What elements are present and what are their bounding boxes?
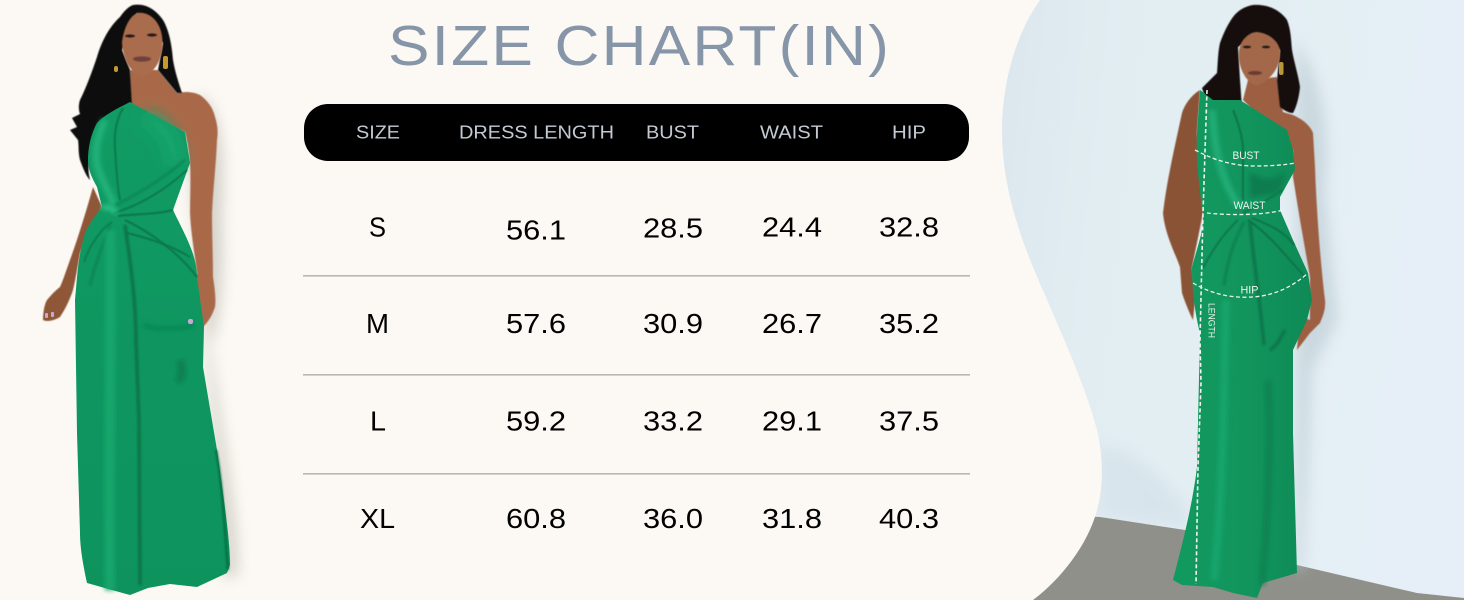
hair bbox=[70, 5, 182, 180]
row XL: XL bbox=[360, 503, 395, 534]
row S: 56.1 bbox=[506, 214, 566, 246]
right arm and shoulder bbox=[130, 70, 218, 328]
model soft shadow bbox=[190, 95, 238, 580]
row XL: 60.8 bbox=[506, 503, 566, 534]
table header bar: WAIST bbox=[760, 122, 823, 142]
hand nails bbox=[45, 312, 193, 324]
dress folds bbox=[84, 108, 228, 590]
row M: M bbox=[366, 308, 389, 339]
green dress bbox=[75, 102, 230, 595]
facial features bbox=[1243, 46, 1270, 75]
bust dashed line bbox=[1195, 150, 1295, 166]
figure right-side arm (image left) bbox=[1163, 90, 1203, 320]
facial features bbox=[125, 34, 157, 62]
row M: 30.9 bbox=[643, 308, 703, 339]
row M: 57.6 bbox=[506, 308, 566, 339]
size table bbox=[303, 104, 970, 534]
row L bbox=[370, 406, 939, 436]
row S: 32.8 bbox=[879, 212, 939, 242]
label WAIST: WAIST bbox=[1234, 200, 1266, 212]
floor bbox=[1033, 516, 1464, 600]
green dress with measurements bbox=[1173, 90, 1312, 598]
right model photo panel bbox=[1000, 0, 1464, 600]
measurement lines bbox=[1193, 90, 1308, 584]
label LENGTH: LENGTH bbox=[1206, 303, 1216, 338]
table header bar bbox=[304, 104, 969, 161]
row M: 26.7 bbox=[762, 308, 822, 339]
wall lower shading bbox=[1104, 457, 1181, 522]
row S bbox=[369, 212, 939, 246]
wall bbox=[1000, 0, 1464, 600]
row L: L bbox=[370, 406, 386, 436]
row M: 35.2 bbox=[879, 308, 939, 339]
dress folds right bbox=[1203, 110, 1306, 585]
label HIP: HIP bbox=[1240, 284, 1258, 296]
hip dashed line bbox=[1193, 273, 1308, 297]
title: SIZE CHART(IN) bbox=[388, 14, 891, 78]
face bbox=[122, 13, 163, 76]
row S: S bbox=[369, 212, 386, 242]
row L: 59.2 bbox=[506, 406, 566, 436]
face bbox=[1239, 32, 1280, 85]
row XL: 31.8 bbox=[762, 503, 822, 534]
row XL: 36.0 bbox=[643, 503, 703, 534]
row S: 28.5 bbox=[643, 212, 703, 244]
row XL bbox=[360, 503, 939, 534]
figure shoulder and arm (image right) bbox=[1243, 77, 1325, 350]
table header bar: BUST bbox=[646, 122, 699, 142]
length dashed line bbox=[1196, 90, 1207, 584]
label BUST: BUST bbox=[1232, 150, 1260, 162]
row S: 24.4 bbox=[762, 212, 822, 242]
model shadow on wall bbox=[1295, 40, 1338, 570]
row L: 33.2 bbox=[643, 406, 703, 436]
earrings bbox=[114, 56, 168, 72]
left model photo bbox=[43, 5, 238, 595]
earring bbox=[1279, 62, 1284, 75]
row XL: 40.3 bbox=[879, 503, 939, 534]
waist dashed line bbox=[1207, 210, 1283, 215]
row M bbox=[366, 308, 939, 339]
table header bar: HIP bbox=[892, 122, 926, 142]
row L: 29.1 bbox=[762, 406, 822, 436]
left arm bbox=[43, 187, 102, 321]
table header bar: SIZE bbox=[356, 122, 400, 142]
table header bar: DRESS LENGTH bbox=[459, 122, 614, 142]
hair bbox=[1202, 5, 1300, 113]
row L: 37.5 bbox=[879, 406, 939, 436]
